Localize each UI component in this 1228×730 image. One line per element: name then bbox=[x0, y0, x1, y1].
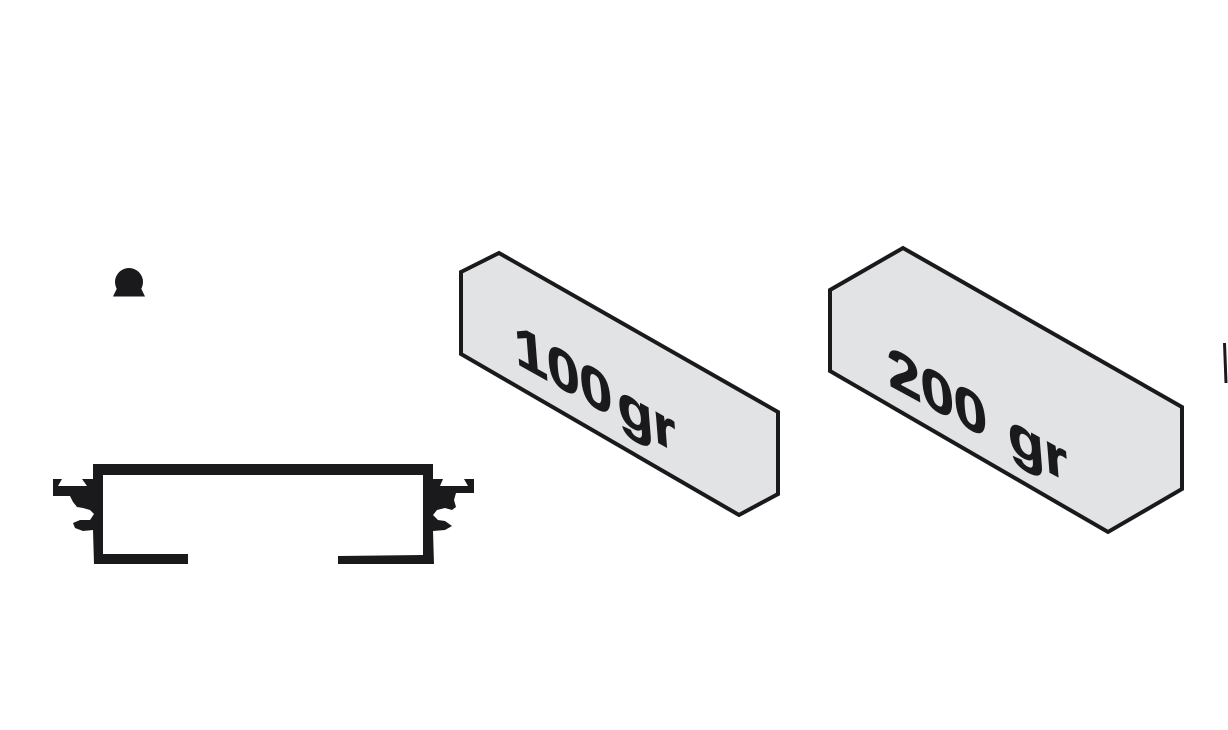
label: 100 gr: 100gr bbox=[512, 311, 678, 466]
plate: 100 gr bbox=[461, 253, 778, 515]
rail profile cross-section bbox=[53, 464, 474, 564]
label: 200 gr: 200 gr bbox=[885, 334, 1070, 496]
icon: dome symbol bbox=[113, 268, 145, 296]
edge mark bbox=[1224, 343, 1226, 383]
plate: 200 gr bbox=[830, 248, 1182, 532]
